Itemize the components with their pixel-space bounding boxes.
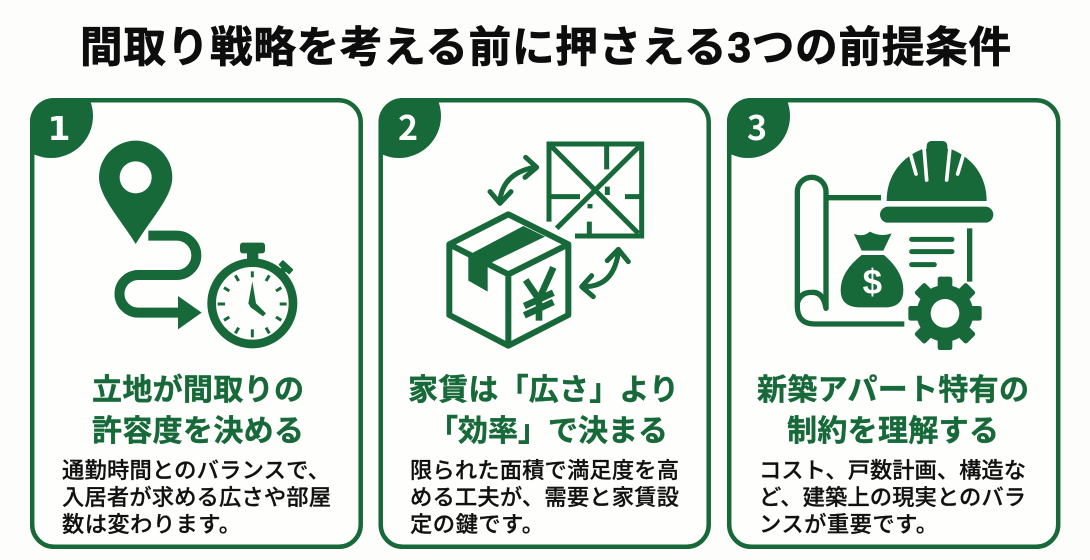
card frame 3 [729, 100, 1058, 547]
icon: blueprint scroll [797, 177, 970, 324]
card frame 2 [381, 100, 709, 547]
number badge 3: 3 [747, 101, 767, 150]
body text 1: 数は変わります。 [62, 512, 241, 537]
body text 2 [410, 458, 679, 537]
icon: blueprint, helmet, money bag and gear [797, 141, 993, 350]
icon: money bag: $ [863, 263, 882, 302]
body text 3: コスト、戸数計画、構造な [759, 458, 1026, 483]
icon: cardboard box with yen [449, 214, 568, 346]
icon: gear [908, 277, 982, 350]
body text 1: 入居者が求める広さや部屋 [62, 485, 331, 510]
number badge 3 [727, 98, 790, 158]
arrow: lower two-way [582, 249, 628, 297]
card frame 1 [32, 100, 361, 547]
icon: money bag [841, 232, 903, 307]
arrow: upper two-way [490, 157, 537, 203]
icon: map pin [99, 141, 172, 244]
icon: floor plan [549, 144, 642, 236]
heading 2: 「効率」で決まる [428, 415, 668, 448]
panel: 立地 [9, 74, 361, 547]
heading 2 [408, 374, 679, 448]
number badge 2 [382, 98, 441, 158]
icon: text lines [912, 239, 952, 265]
body text 3: ンスが重要です。 [759, 512, 938, 537]
body text 2: 限られた面積で満足度を高 [410, 458, 679, 483]
icon: winding route arrow [119, 236, 202, 329]
icon: box, floor plan and arrows [449, 144, 642, 346]
number badge 2: 2 [398, 101, 418, 150]
icon: hard hat [880, 141, 993, 223]
icon: stopwatch [212, 243, 294, 344]
body text 3: ど、建築上の現実とのバラ [759, 485, 1026, 510]
panel: 家賃 [357, 74, 709, 547]
body text 2: める工夫が、需要と家賃設 [410, 485, 679, 510]
panel: 新築アパート [706, 74, 1058, 547]
heading 1: 許容度を決める [92, 415, 304, 448]
heading 1 [92, 373, 304, 448]
title: 間取り戦略を考える前に押さえる3つの前提条件 [80, 25, 1011, 72]
number badge 1 [30, 98, 93, 158]
heading 2: 家賃は「広さ」より [408, 374, 679, 407]
number badge 1: 1 [48, 109, 70, 148]
body text 1: 通勤時間とのバランスで、 [62, 458, 330, 483]
heading 1: 立地が間取りの [92, 373, 304, 407]
body text 3 [759, 458, 1026, 537]
body text 1 [62, 458, 331, 537]
heading 3: 制約を理解する [787, 415, 999, 448]
heading 3 [757, 374, 1029, 448]
body text 2: 定の鍵です。 [410, 512, 544, 537]
icon: pin, route and stopwatch [99, 141, 294, 344]
heading 3: 新築アパート特有の [757, 374, 1029, 407]
